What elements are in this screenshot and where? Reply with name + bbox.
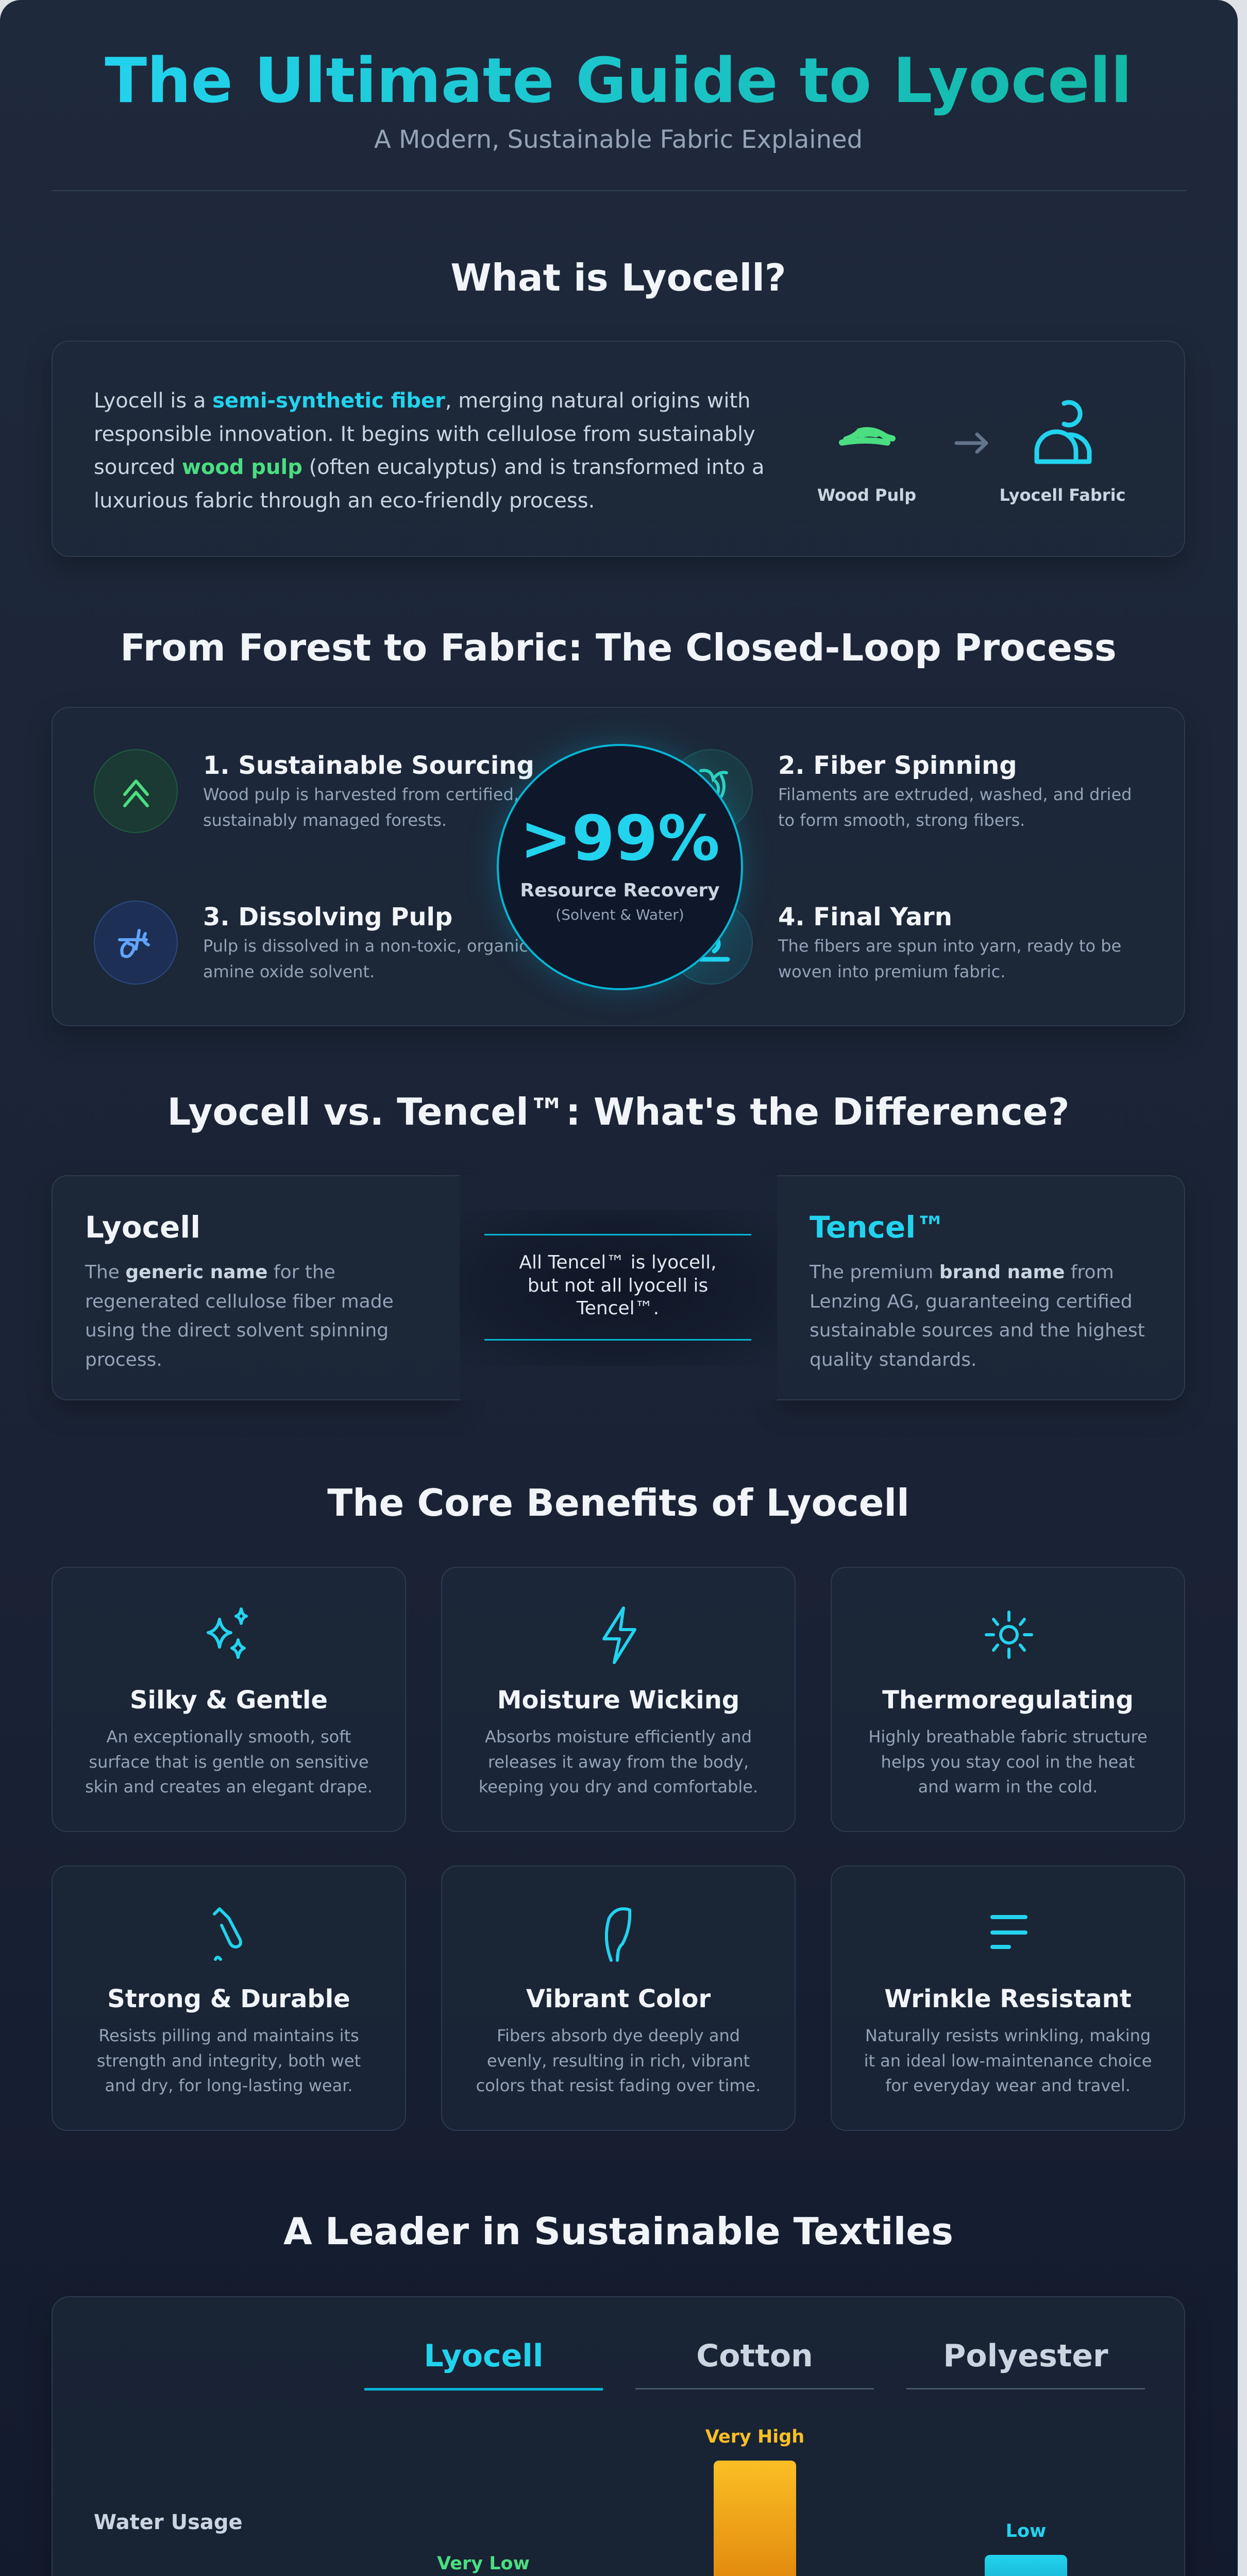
benefit card: moisture: releases it away from the body,	[488, 1752, 749, 1771]
benefit card: strong: and dry, for long-lasting wear.	[105, 2076, 353, 2095]
step 1: Wood pulp is harvested from certified,	[203, 785, 519, 804]
icon: yarn	[669, 901, 753, 985]
stat circle: resource recovery: Resource Recovery	[520, 880, 720, 901]
heading: what is lyocell: What is Lyocell?	[450, 256, 786, 299]
step 2: to form smooth, strong fibers.	[778, 810, 1025, 830]
column headers: Lyocell	[424, 2338, 543, 2374]
icon: tool	[213, 1907, 242, 1961]
benefit card: wrinkle: Wrinkle Resistant	[884, 1985, 1132, 2013]
heading: core benefits: The Core Benefits of Lyocell	[327, 1481, 909, 1524]
benefit card: vibrant: colors that resist fading over time.	[476, 2076, 761, 2095]
column headers	[364, 2338, 1145, 2391]
benefit card: thermo: helps you stay cool in the heat	[881, 1752, 1135, 1771]
benefit card: silky: An exceptionally smooth, soft	[107, 1727, 351, 1747]
benefit card: wrinkle	[831, 1866, 1185, 2131]
subtitle: A Modern, Sustainable Fabric Explained	[374, 125, 863, 154]
step 4: woven into premium fabric.	[778, 962, 1005, 981]
step 2: Filaments are extruded, washed, and dried	[778, 785, 1132, 804]
panel: lyocell	[52, 1175, 460, 1400]
benefit card: silky: skin and creates an elegant drape.	[85, 1777, 373, 1797]
step 3	[94, 901, 528, 985]
bar: polyester low: Low	[1006, 2521, 1046, 2541]
panel: what is lyocell	[52, 341, 1185, 557]
step 1: 1. Sustainable Sourcing	[203, 751, 534, 780]
callout: all tencel is lyocell: Tencel™.	[577, 1298, 659, 1319]
benefit card: strong	[52, 1866, 406, 2131]
benefit card: thermo	[831, 1567, 1185, 1832]
icon: sun	[985, 1611, 1033, 1659]
benefit card: vibrant: Fibers absorb dye deeply and	[497, 2026, 740, 2045]
benefit card: thermo: Highly breathable fabric structure	[868, 1727, 1148, 1747]
stat circle: resource recovery	[497, 744, 743, 990]
icon: leaf	[605, 1907, 632, 1962]
benefit card: wrinkle: it an ideal low-maintenance choice	[864, 2050, 1152, 2070]
panel: process	[52, 707, 1185, 1026]
heading: closed-loop process: From Forest to Fabric: The Closed-Loop Process	[120, 626, 1117, 669]
icon: chevrons	[94, 749, 178, 833]
icon: spinning	[669, 749, 753, 833]
benefit card: thermo: Thermoregulating	[882, 1686, 1134, 1715]
callout: all tencel is lyocell	[460, 1175, 777, 1400]
benefit card: moisture	[441, 1567, 796, 1832]
icon: lyocell fabric	[1035, 400, 1091, 464]
panel: tencel: The premium brand name from Lenzing AG, guaranteeing certified sustainable sources and the highest quality standards.	[810, 1262, 1145, 1370]
row label: water usage: Water Usage	[94, 2511, 243, 2534]
stat circle: resource recovery: >99%	[520, 803, 720, 875]
icon: bolt	[602, 1606, 636, 1664]
panel: tencel	[777, 1175, 1185, 1400]
step 1: sustainably managed forests.	[203, 810, 447, 830]
benefit card: wrinkle: Naturally resists wrinkling, making	[865, 2026, 1151, 2045]
panel: lyocell: Lyocell	[85, 1210, 200, 1245]
callout: all tencel is lyocell: but not all lyocell is	[528, 1275, 708, 1296]
heading: sustainable textiles: A Leader in Sustainable Textiles	[283, 2210, 953, 2253]
benefit card: strong: strength and integrity, both wet	[97, 2050, 361, 2070]
panel: lyocell: The generic name for the regenerated cellulose fiber made using the direct solvent spinning process.	[85, 1262, 394, 1370]
column headers: Polyester	[943, 2338, 1108, 2374]
stat circle: resource recovery: (Solvent & Water)	[555, 906, 684, 923]
benefit card: moisture: Moisture Wicking	[497, 1686, 739, 1715]
label: lyocell fabric: Lyocell Fabric	[999, 485, 1125, 505]
step 3: 3. Dissolving Pulp	[203, 903, 452, 931]
text block: definition: Lyocell is a semi-synthetic fiber, merging natural origins with responsible innovation. It begins with cellulose from sustainably sourced wood pulp (often eucalyptus) and is transformed into a luxurious fabric through an eco-friendly process.	[94, 389, 765, 512]
benefit card: moisture: keeping you dry and comfortable.	[479, 1777, 758, 1797]
benefit card: silky	[52, 1567, 406, 1832]
heading: lyocell vs tencel: Lyocell vs. Tencel™: What's the Difference?	[167, 1090, 1069, 1133]
arrow	[954, 433, 988, 453]
callout: all tencel is lyocell: All Tencel™ is lyocell,	[519, 1252, 717, 1273]
benefit card: strong: Strong & Durable	[107, 1985, 350, 2013]
panel: comparison chart	[52, 2296, 1185, 2576]
icon: sparkles	[207, 1607, 248, 1659]
step 4: The fibers are spun into yarn, ready to be	[778, 936, 1121, 956]
benefit card: silky: Silky & Gentle	[130, 1686, 328, 1715]
title: The Ultimate Guide to Lyocell	[105, 45, 1132, 117]
panel: tencel: Tencel™	[810, 1210, 946, 1245]
bar: polyester low	[985, 2521, 1067, 2576]
icon: lines	[990, 1915, 1027, 1949]
benefit card: thermo: and warm in the cold.	[918, 1777, 1098, 1797]
bar: lyocell very low: Very Low	[437, 2553, 530, 2574]
icon: dissolving	[94, 901, 178, 985]
benefit card: vibrant: Vibrant Color	[526, 1985, 711, 2013]
benefit card: silky: surface that is gentle on sensitive	[89, 1752, 369, 1771]
benefit card: vibrant	[441, 1866, 796, 2131]
step 3: amine oxide solvent.	[203, 962, 375, 981]
step 2	[682, 749, 1132, 830]
benefit card: wrinkle: for everyday wear and travel.	[885, 2076, 1131, 2095]
bar: cotton very high: Very High	[705, 2427, 804, 2447]
step 3: Pulp is dissolved in a non-toxic, organic	[203, 936, 528, 956]
icon: wood pulp	[839, 427, 896, 446]
benefit card: moisture: Absorbs moisture efficiently and	[485, 1727, 752, 1747]
step 4: 4. Final Yarn	[778, 903, 952, 931]
column headers: Cotton	[696, 2338, 813, 2374]
bar: cotton very high	[705, 2427, 804, 2576]
benefit card: vibrant: evenly, resulting in rich, vibrant	[487, 2050, 750, 2070]
step 2: 2. Fiber Spinning	[778, 751, 1017, 780]
benefit card: strong: Resists pilling and maintains its	[98, 2026, 359, 2045]
step 4	[682, 903, 1121, 985]
label: wood pulp: Wood Pulp	[817, 485, 916, 505]
step 1	[94, 749, 534, 833]
